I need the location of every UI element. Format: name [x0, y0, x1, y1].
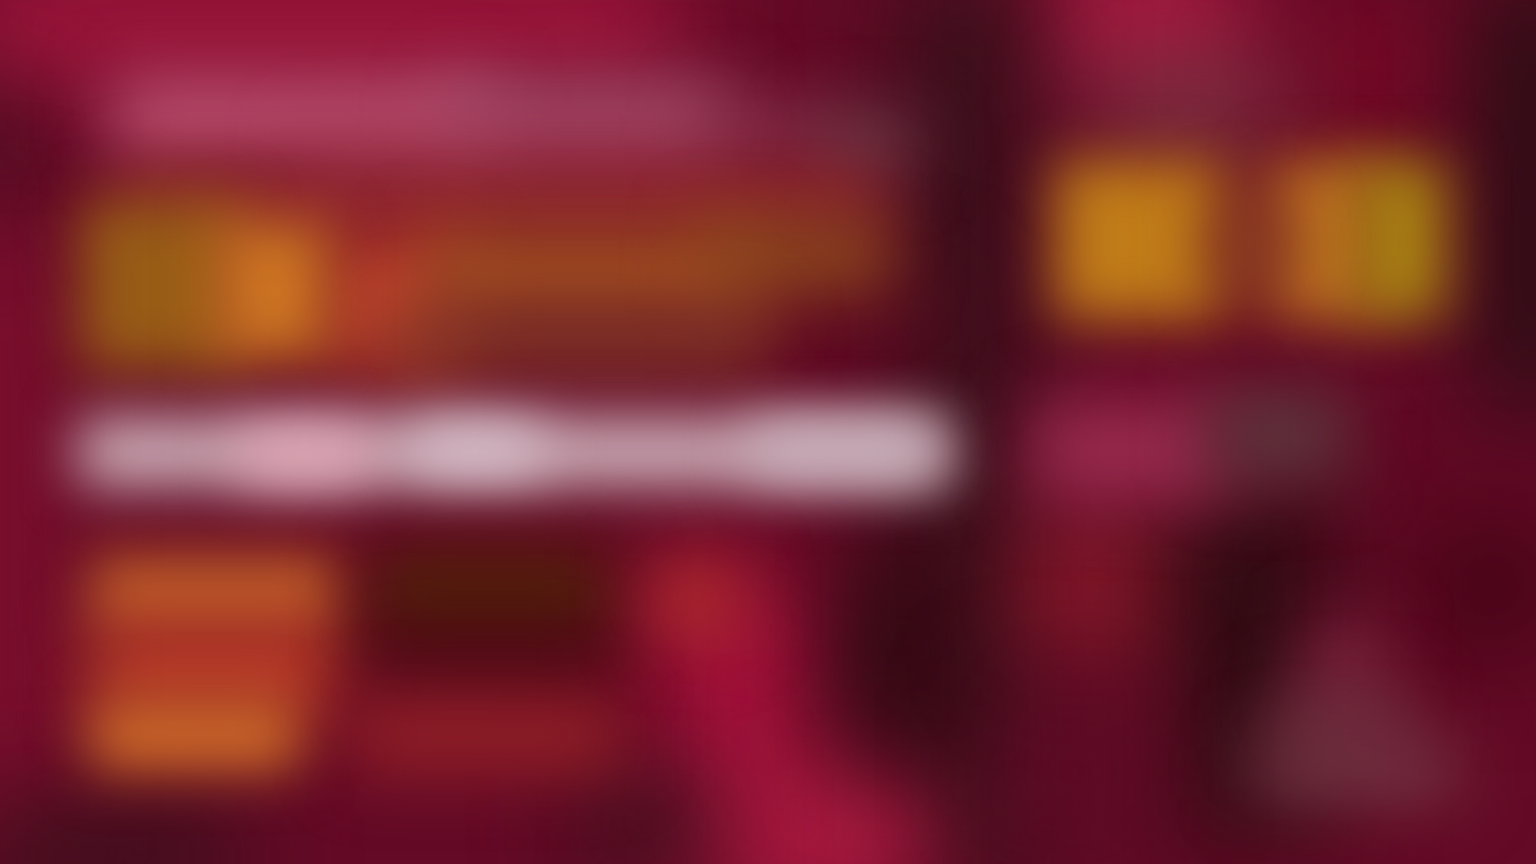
- panel: lower-right muted triangle: [1222, 596, 1474, 826]
- panel: right muted block under amber: [992, 362, 1374, 538]
- panel: lower-centre dark and red blocks: [322, 511, 766, 804]
- panel: lower-left orange blocks: [49, 520, 372, 810]
- panel: pale horizontal band: [38, 371, 991, 532]
- panel: right orange and amber blocks: [1014, 119, 1486, 361]
- heading: blurred title band: [74, 38, 933, 194]
- panel: orange banner with side block: [48, 136, 926, 406]
